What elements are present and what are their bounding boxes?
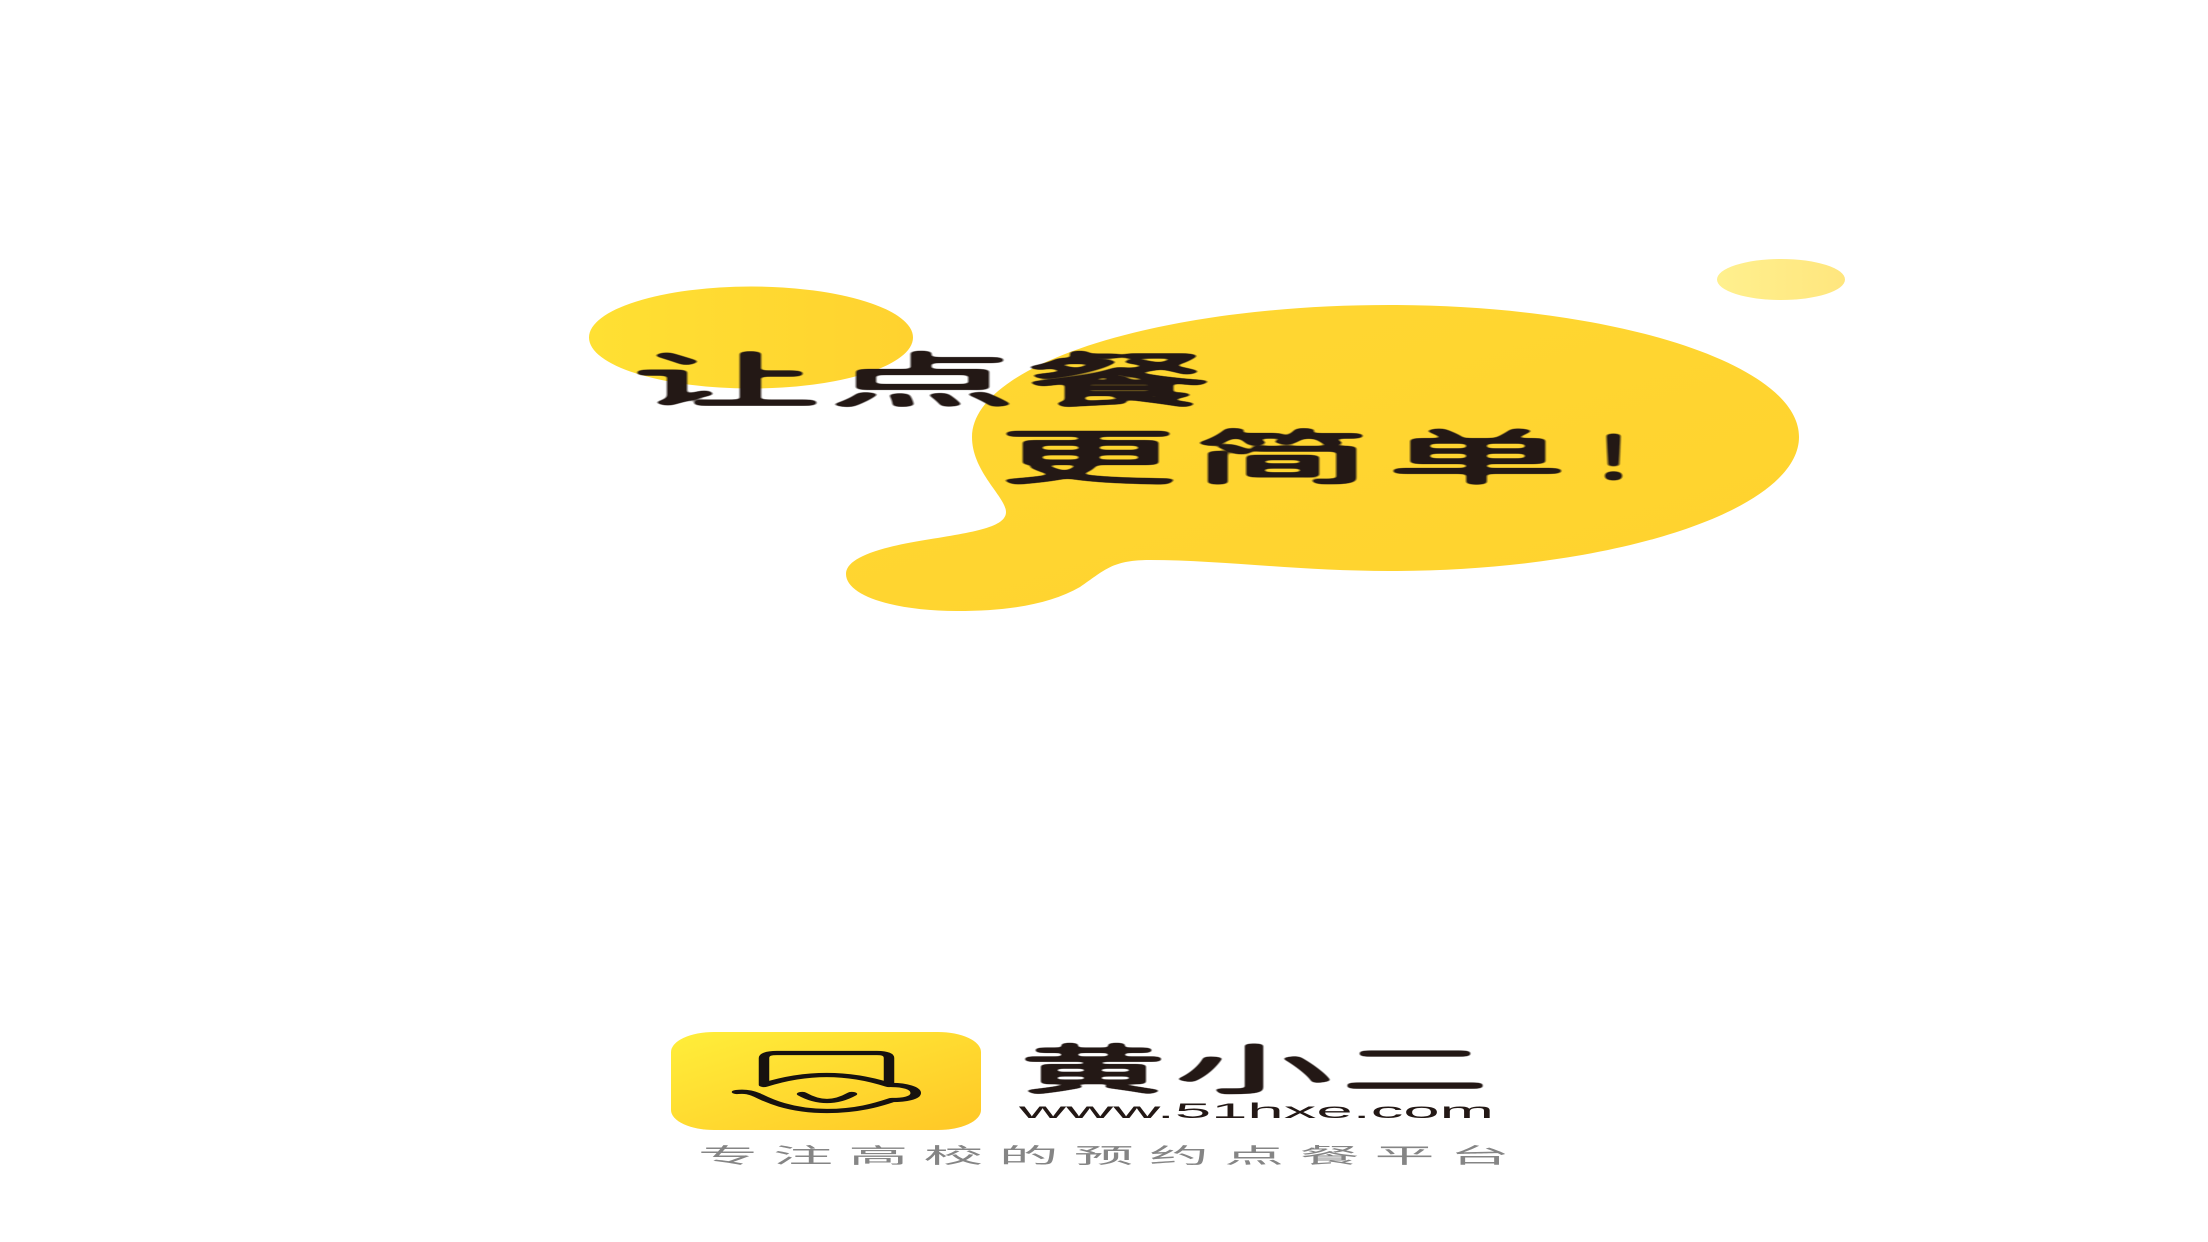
brand name 黄小二 [1020, 1026, 1488, 1105]
large yellow speech blob [846, 305, 1799, 611]
brand name 黄小二: 小 [1175, 1026, 1332, 1105]
headline: 让点餐 更简单! [632, 333, 1627, 497]
headline: 让点餐 更简单!: 让 [632, 333, 821, 420]
headline: 让点餐 更简单!: 点 [828, 333, 1017, 420]
brand name 黄小二: 黄 [1020, 1026, 1166, 1105]
headline: 让点餐 更简单!: ! [1600, 410, 1627, 497]
icon: hat and face [737, 1053, 916, 1111]
headline: 让点餐 更简单!: 简 [1192, 409, 1372, 496]
headline: 让点餐 更简单!: 餐 [1024, 333, 1213, 420]
pale yellow dot [1717, 259, 1845, 300]
small yellow blob [589, 286, 913, 388]
tagline: 专注高校的预约点餐平台 [698, 1144, 1525, 1168]
headline: 让点餐 更简单!: 单 [1387, 409, 1567, 496]
website url: www.51hxe.com [1016, 1100, 1494, 1123]
brand name 黄小二: 二 [1342, 1026, 1488, 1105]
logo: app icon [671, 1032, 981, 1130]
headline: 让点餐 更简单!: 更 [998, 409, 1178, 496]
